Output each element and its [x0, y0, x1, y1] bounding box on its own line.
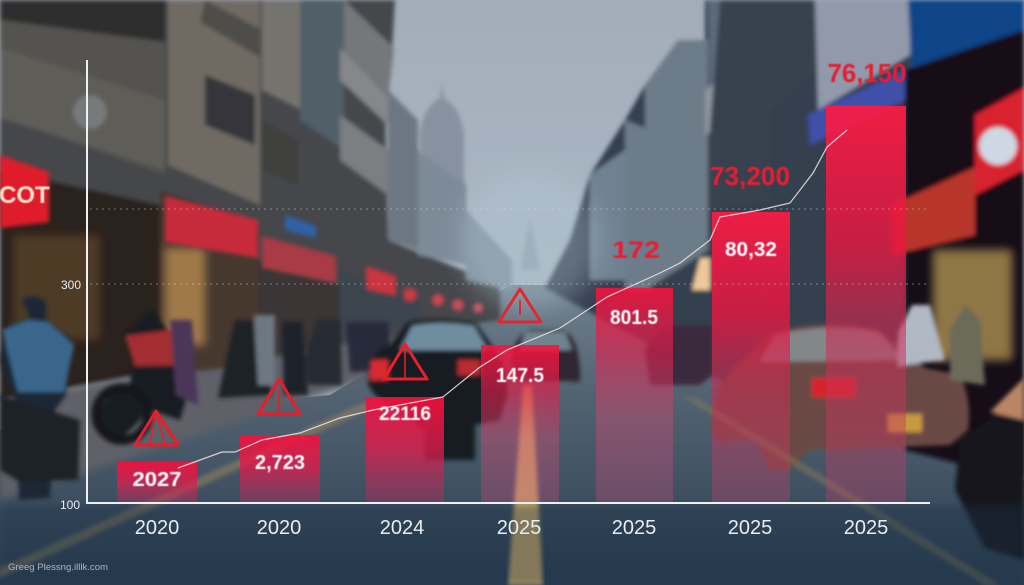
- year 2020: 2020: [257, 517, 301, 539]
- people and motorbikes on the left: [0, 296, 392, 500]
- warning icon: first: [135, 411, 178, 445]
- bar: third 2025: [712, 212, 790, 503]
- value 22116: 22116: [379, 404, 431, 425]
- faint dotted gridline lower: [90, 283, 930, 285]
- road surface: [0, 285, 1024, 585]
- bar chart: [117, 106, 906, 503]
- left sign glyph text: COT: [0, 182, 50, 209]
- y label 100: 100: [60, 498, 80, 512]
- right cars and riders: [645, 305, 1024, 560]
- bar: 2024: [366, 397, 444, 503]
- distant dome tower: [420, 82, 540, 270]
- year 2025: 2025: [728, 517, 772, 539]
- bar: fourth 2025: [826, 106, 906, 503]
- value 172: 172: [612, 237, 660, 264]
- right buildings: [545, 0, 1024, 480]
- year 2020: 2020: [135, 517, 179, 539]
- value 147.5: 147.5: [496, 365, 544, 387]
- warning icon: second: [258, 379, 300, 414]
- y axis labels: [60, 278, 81, 512]
- faint dotted gridline upper: [90, 208, 930, 210]
- value 2027: 2027: [132, 469, 182, 491]
- left buildings: [0, 0, 512, 400]
- value 2,723: 2,723: [255, 452, 305, 474]
- year 2024: 2024: [380, 517, 424, 539]
- bar: second 2020: [240, 435, 320, 503]
- left shop signs: [0, 95, 483, 313]
- x axis year labels: [135, 517, 888, 539]
- year 2025: 2025: [844, 517, 888, 539]
- warning icon: fourth: [499, 289, 541, 322]
- year 2025: 2025: [497, 517, 541, 539]
- left road shoulder: [0, 300, 500, 500]
- rear car centre: [368, 319, 580, 460]
- source credit: Greeg Plessng.illlk.com: [8, 562, 108, 573]
- lighter haze at the vanishing point: [460, 170, 600, 310]
- road markings: [0, 385, 1000, 585]
- bar: first 2025: [481, 345, 559, 503]
- value 80,32: 80,32: [725, 239, 777, 261]
- red headline values above bars: [612, 58, 906, 264]
- value 801.5: 801.5: [610, 307, 658, 329]
- value 73,200: 73,200: [710, 161, 790, 191]
- warning icon: third: [384, 344, 427, 379]
- year 2025: 2025: [612, 517, 656, 539]
- chart axes: [87, 60, 930, 503]
- y label 300: 300: [61, 278, 81, 292]
- value 76,150: 76,150: [828, 58, 906, 88]
- dark lower vignette: [0, 505, 1024, 585]
- trend line: [178, 130, 847, 468]
- bar: first 2020: [117, 462, 197, 503]
- bar value labels: [132, 239, 777, 491]
- bar: second 2025: [596, 288, 673, 503]
